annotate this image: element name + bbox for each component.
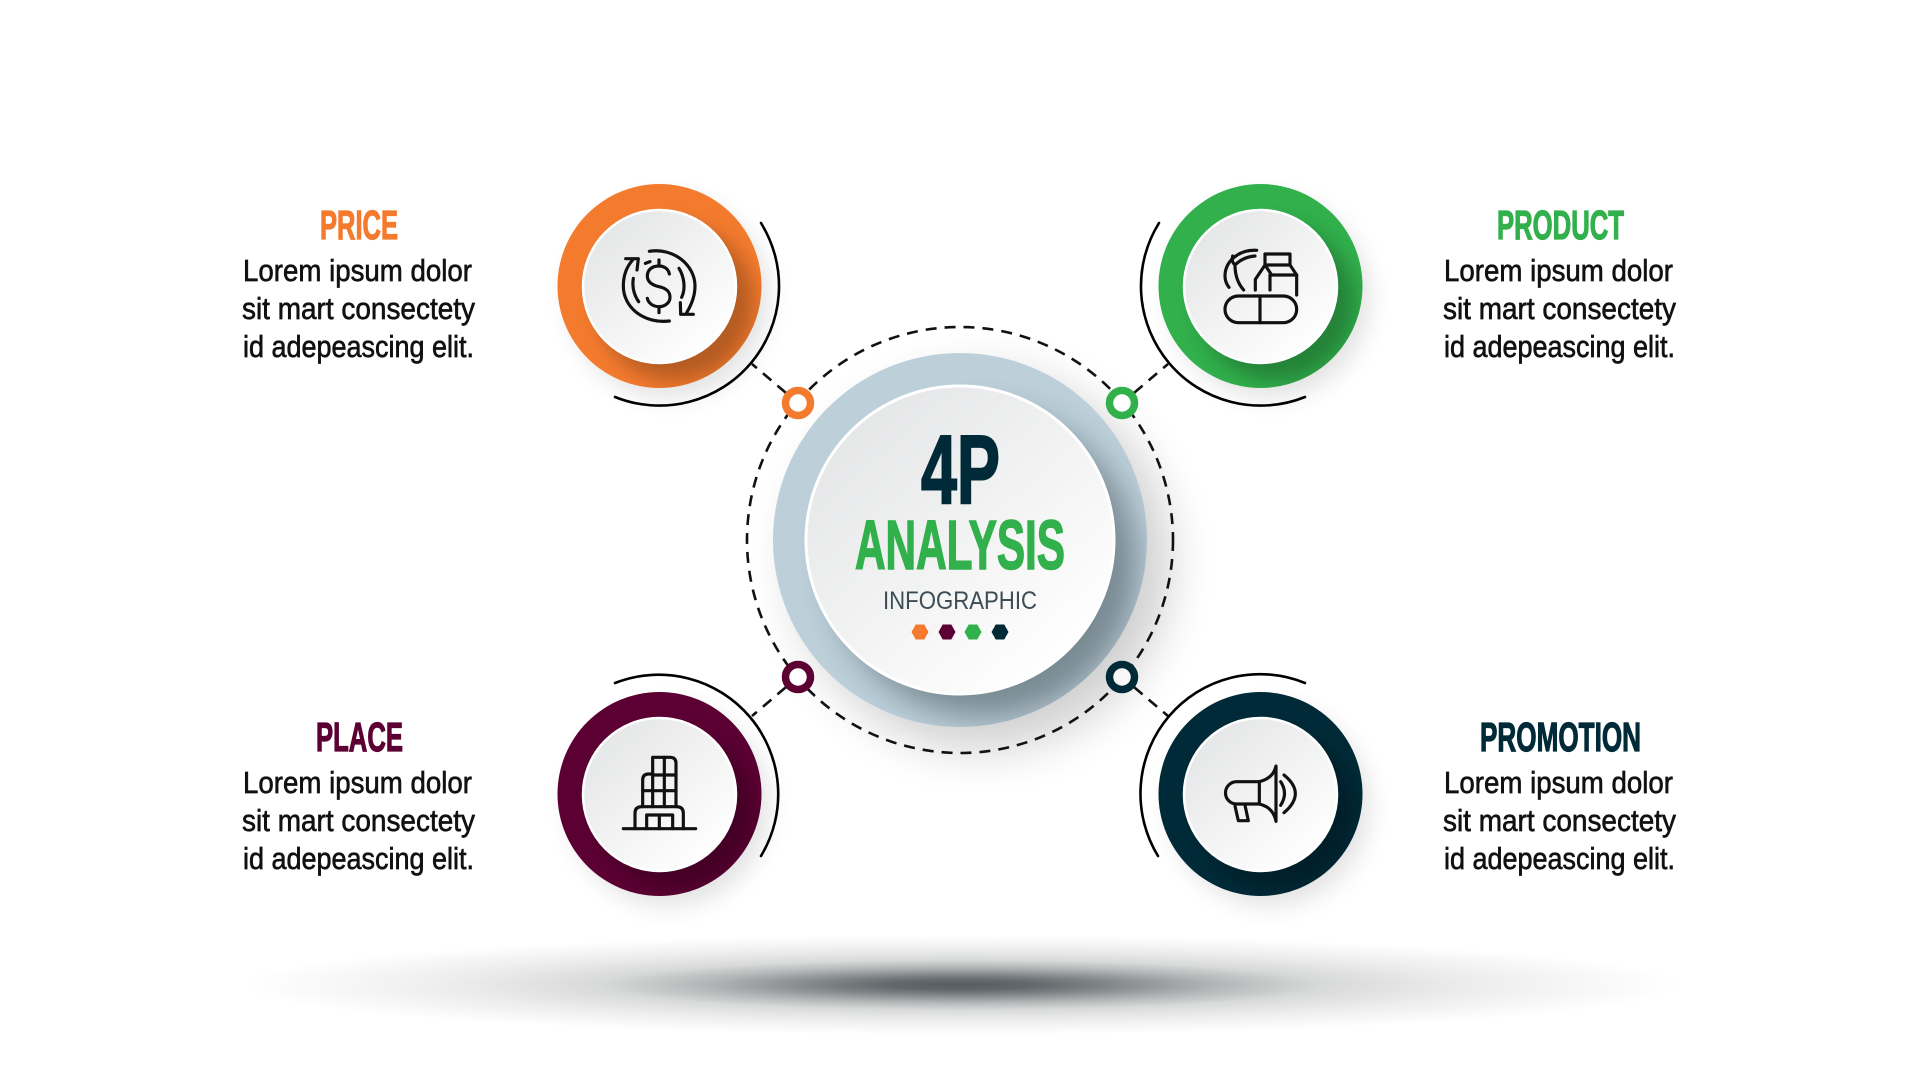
body: promotion: sit mart consectety xyxy=(1443,803,1676,838)
heading: product: PRODUCT xyxy=(1497,202,1624,248)
body: product xyxy=(1443,253,1676,364)
title: 4P: 4P xyxy=(921,415,1000,524)
body: product: sit mart consectety xyxy=(1443,291,1676,326)
disc: promotion xyxy=(1184,718,1337,871)
body: promotion: Lorem ipsum dolor xyxy=(1444,765,1673,800)
heading: price: PRICE xyxy=(320,202,398,248)
dashed orbit xyxy=(747,327,1173,753)
body: price: Lorem ipsum dolor xyxy=(243,253,472,288)
panel: price circle xyxy=(558,184,779,406)
ring: product xyxy=(1158,184,1362,388)
white disc xyxy=(806,386,1114,694)
body: place: id adepeascing elit. xyxy=(243,841,474,876)
body: place: sit mart consectety xyxy=(242,803,475,838)
disc: price xyxy=(583,210,736,363)
body: promotion xyxy=(1443,765,1676,876)
node ring: promotion xyxy=(1110,664,1134,690)
ring: promotion xyxy=(1158,692,1362,896)
ring inner shadow xyxy=(832,412,1138,718)
ring: price xyxy=(558,184,762,388)
heading: place: PLACE xyxy=(316,714,403,760)
body: price xyxy=(242,253,475,364)
arc: place xyxy=(615,675,778,856)
subtitle: INFOGRAPHIC: INFOGRAPHIC xyxy=(883,587,1037,615)
infographic canvas xyxy=(242,184,1676,1028)
floor shadow xyxy=(241,935,1681,1035)
panel: place circle xyxy=(558,675,778,906)
heading: promotion: PROMOTION xyxy=(1480,714,1641,760)
node ring: product xyxy=(1110,390,1134,416)
body: price: id adepeascing elit. xyxy=(243,329,474,364)
icon: dollar cycle xyxy=(623,251,695,321)
ring: place xyxy=(558,692,762,896)
connector: price xyxy=(752,364,786,393)
icon: building xyxy=(623,757,696,829)
body: place xyxy=(242,765,475,876)
node ring: place xyxy=(786,664,810,690)
icon: products xyxy=(1225,250,1297,323)
text block: price xyxy=(242,202,475,364)
blue ring xyxy=(773,353,1147,727)
body: price: sit mart consectety xyxy=(242,291,475,326)
center hub xyxy=(747,327,1173,753)
panel: product circle xyxy=(1141,184,1370,406)
text block: promotion xyxy=(1443,714,1676,876)
body: product: Lorem ipsum dolor xyxy=(1444,253,1673,288)
body: product: id adepeascing elit. xyxy=(1444,329,1675,364)
color hexagon dots xyxy=(912,624,1008,640)
text block: product xyxy=(1443,202,1676,364)
connector: place xyxy=(752,687,786,716)
arc: price xyxy=(615,223,779,406)
disc: place xyxy=(583,718,736,871)
arc: product xyxy=(1141,223,1305,406)
body: place: Lorem ipsum dolor xyxy=(243,765,472,800)
arc: promotion xyxy=(1140,674,1305,856)
body: promotion: id adepeascing elit. xyxy=(1444,841,1675,876)
icon: megaphone xyxy=(1225,766,1295,821)
hub drop shadow xyxy=(795,375,1169,749)
title: ANALYSIS: ANALYSIS xyxy=(855,506,1065,584)
text block: place xyxy=(242,714,475,876)
node ring: price xyxy=(786,390,810,416)
panel: promotion circle xyxy=(1140,674,1370,906)
connector: product xyxy=(1134,364,1168,393)
disc: product xyxy=(1184,210,1337,363)
connector: promotion xyxy=(1134,687,1168,716)
